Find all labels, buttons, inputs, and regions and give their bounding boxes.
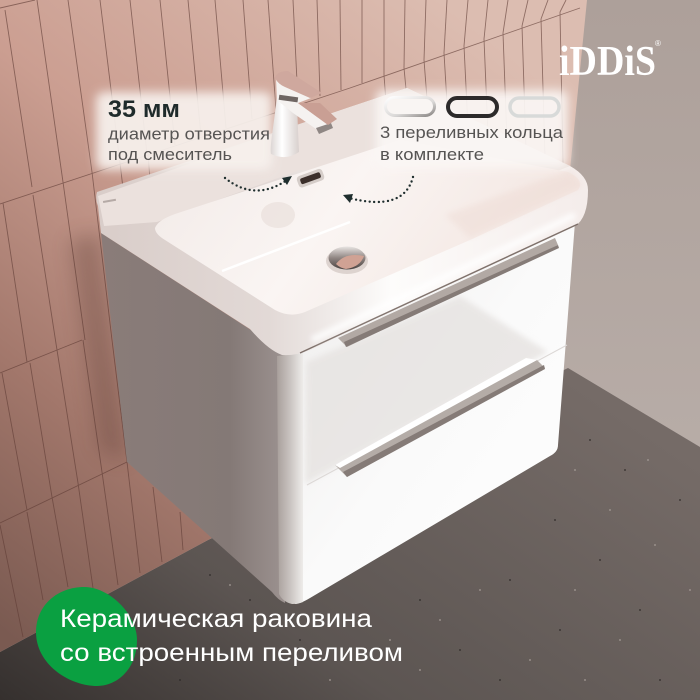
cabinet side bbox=[101, 233, 285, 603]
right callout text: в комплекте bbox=[380, 146, 484, 164]
white ring bbox=[510, 98, 559, 116]
faucet aerator bbox=[316, 123, 333, 134]
basin bbox=[155, 140, 580, 315]
basin reflection bbox=[261, 202, 295, 228]
black ring bbox=[448, 98, 497, 116]
basin pink reflection bbox=[445, 170, 583, 238]
cabinet reflection bbox=[305, 296, 548, 484]
right callout text bbox=[380, 124, 564, 164]
overflow rings bbox=[386, 98, 559, 116]
main caption: со встроенным переливом bbox=[60, 639, 403, 667]
faucet band bbox=[279, 95, 298, 102]
drain bbox=[326, 246, 368, 274]
left glow panel bbox=[96, 92, 272, 170]
floor bbox=[0, 368, 700, 700]
right glow panel bbox=[376, 90, 568, 168]
faucet bbox=[271, 71, 337, 157]
cabinet front bbox=[295, 222, 575, 604]
basin ridge bbox=[222, 222, 350, 271]
overflow hole bbox=[296, 168, 325, 188]
faucet body bbox=[271, 98, 299, 157]
drawer split line bbox=[307, 345, 567, 485]
sink logo mark bbox=[103, 199, 116, 203]
lower handle bbox=[335, 358, 545, 477]
cabinet bbox=[101, 222, 575, 604]
faucet spout bbox=[276, 78, 328, 129]
sink body bbox=[96, 88, 588, 355]
logo: iDDiS bbox=[559, 39, 656, 85]
chrome ring bbox=[386, 98, 434, 116]
main caption bbox=[60, 605, 403, 667]
sink underside line bbox=[300, 224, 578, 353]
logo: ® bbox=[655, 39, 661, 48]
sink bbox=[96, 88, 588, 355]
left arrow bbox=[225, 176, 292, 191]
back shelf bbox=[98, 88, 570, 226]
main caption: Керамическая раковина bbox=[60, 605, 372, 633]
cabinet shadow on wall bbox=[70, 233, 127, 462]
rim highlight bbox=[312, 215, 575, 340]
right callout text: 3 переливных кольца bbox=[380, 124, 564, 142]
left callout text: под смеситель bbox=[108, 146, 232, 164]
faucet spout chrome bbox=[298, 103, 337, 125]
pink tile wall bbox=[0, 0, 587, 652]
left callout text bbox=[108, 126, 270, 164]
faucet lever bbox=[275, 71, 322, 98]
top handle bbox=[338, 238, 559, 347]
right arrow bbox=[343, 177, 413, 203]
left callout text: диаметр отверстия bbox=[108, 126, 270, 144]
green blob bbox=[36, 587, 137, 686]
cabinet corner bbox=[277, 353, 303, 604]
left callout heading: 35 мм bbox=[108, 96, 180, 123]
